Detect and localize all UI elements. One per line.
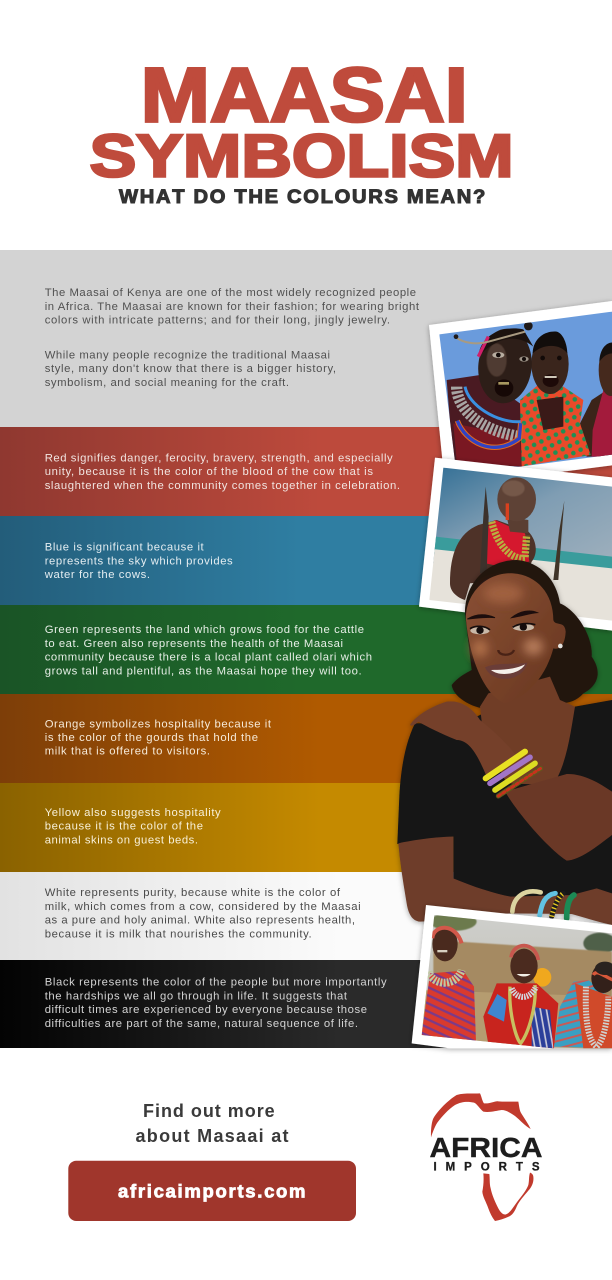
- intro paragraph 1: colors with intricate patterns; and for their long, jingly jewelry.: [45, 315, 390, 327]
- call to action text: [136, 1101, 288, 1146]
- chest: [480, 677, 575, 785]
- title line: SYMBOLISM: SYMBOLISM: [90, 121, 514, 189]
- black text: difficulties are part of the same, natural sequence of life.: [45, 1018, 358, 1030]
- red text: [45, 453, 400, 492]
- white text: milk, which comes from a cow, considered by the Maasai: [45, 901, 361, 913]
- red text: Red signifies danger, ferocity, bravery, strength, and especially: [45, 453, 393, 465]
- panel: orange: [0, 694, 612, 783]
- black text: Black represents the color of the people but more importantly: [45, 976, 387, 988]
- logo map outline bottom: [482, 1173, 533, 1221]
- black text: [45, 976, 387, 1030]
- logo word AFRICA: AFRICA: [430, 1132, 542, 1163]
- logo: Africa Imports: [430, 1093, 542, 1221]
- panel: white: [0, 872, 612, 960]
- green text: Green represents the land which grows food for the cattle: [45, 624, 364, 636]
- red text: slaughtered when the community comes together in celebration.: [45, 480, 400, 492]
- lower left arm: [398, 837, 612, 925]
- button: africaimports.com: africaimports.com: [118, 1180, 306, 1201]
- green text: community because there is a local plant called olari which: [45, 652, 372, 664]
- orange text: milk that is offered to visitors.: [45, 746, 210, 758]
- arm bracelets: [512, 891, 574, 918]
- yellow text: animal skins on guest beds.: [45, 835, 198, 847]
- intro paragraph 1: in Africa. The Maasai are known for their fashion; for wearing bright: [45, 301, 420, 313]
- red text: unity, because it is the color of the blood of the cow that is: [45, 466, 373, 478]
- blue text: represents the sky which provides: [45, 555, 233, 567]
- panel: green: [0, 605, 612, 694]
- shirt: [397, 700, 612, 898]
- photo: three Maasai women: [412, 905, 612, 1050]
- intro paragraph 2: While many people recognize the traditional Maasai: [45, 349, 330, 361]
- intro paragraph 2: style, many don't know that there is a bigger history,: [45, 363, 336, 375]
- intro paragraph 2: [45, 349, 336, 389]
- face: [466, 573, 566, 703]
- yellow text: because it is the color of the: [45, 821, 203, 833]
- white text: [45, 887, 361, 940]
- blue text: Blue is significant because it: [45, 541, 205, 553]
- panel: yellow: [0, 783, 612, 872]
- hair: [452, 560, 598, 708]
- subtitle: WHAT DO THE COLOURS MEAN?: [119, 187, 487, 208]
- hand on shoulder: [410, 701, 518, 777]
- blue text: water for the cows.: [44, 569, 150, 581]
- yellow text: Yellow also suggests hospitality: [45, 807, 221, 819]
- orange text: [45, 718, 272, 758]
- black text: difficult times are experienced by everyone because those: [45, 1004, 367, 1016]
- wrist bracelets: [486, 752, 541, 796]
- white text: White represents purity, because white is the color of: [45, 887, 341, 899]
- panel: black: [0, 960, 612, 1048]
- panel: introduction: [0, 250, 612, 427]
- title: [90, 53, 514, 208]
- call to action text: about Masaai at: [136, 1126, 288, 1146]
- title line: MAASAI: MAASAI: [141, 53, 468, 138]
- blue text: [44, 541, 233, 581]
- orange text: Orange symbolizes hospitality because it: [45, 718, 272, 730]
- right forearm: [505, 774, 612, 861]
- green text: to eat. Green also represents the health of the Maasai: [45, 638, 343, 650]
- logo word IMPORTS: IMPORTS: [434, 1162, 540, 1174]
- button: africaimports.com: [68, 1161, 356, 1221]
- white text: because it is milk that nourishes the community.: [45, 928, 312, 940]
- logo map outline top: [431, 1093, 531, 1137]
- green text: [45, 624, 372, 677]
- intro paragraph 1: The Maasai of Kenya are one of the most widely recognized people: [45, 287, 416, 299]
- call to action text: Find out more: [143, 1101, 275, 1121]
- white text: as a pure and holy animal. White also represents health,: [45, 915, 355, 927]
- intro paragraph 2: symbolism, and social meaning for the craft.: [45, 377, 289, 389]
- green text: grows tall and plentiful, as the Maasai hope they will too.: [45, 665, 362, 677]
- panel: red: [0, 427, 612, 516]
- photo: Maasai warrior on beach: [419, 458, 612, 631]
- panel: blue: [0, 516, 612, 605]
- orange text: is the color of the gourds that hold the: [45, 732, 258, 744]
- intro paragraph 1: [45, 287, 420, 327]
- yellow text: [45, 807, 221, 847]
- photo: smiling woman with beaded bracelets: [397, 560, 612, 925]
- photo: Maasai men against blue sky: [429, 301, 612, 487]
- black text: the hardships we all go through in life. It suggests that: [45, 990, 348, 1002]
